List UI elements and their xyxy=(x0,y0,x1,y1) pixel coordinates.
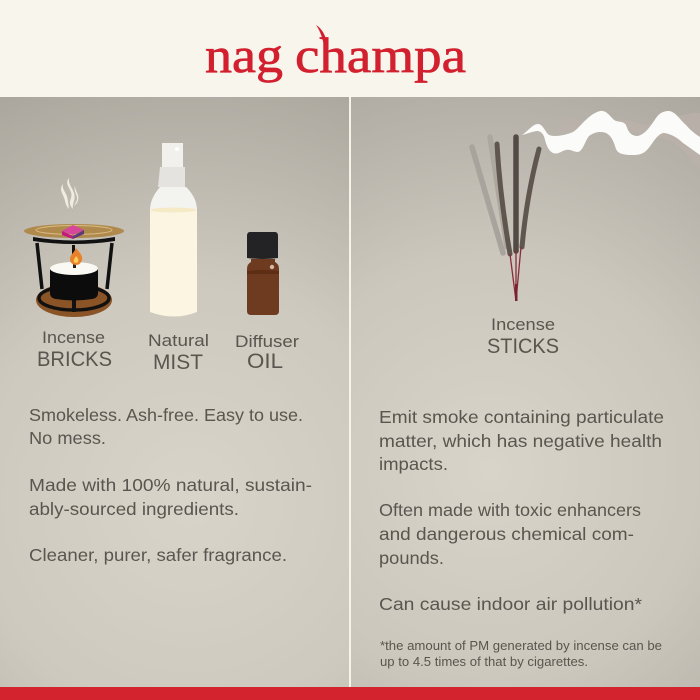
panel: left products xyxy=(0,97,349,687)
label: incense bricks: Incense xyxy=(42,329,105,347)
label: incense sticks: STICKS xyxy=(487,335,559,358)
label: natural mist: Natural xyxy=(148,332,209,350)
icon: diffuser oil bottle xyxy=(247,232,279,315)
icon: smoke xyxy=(522,111,700,169)
label: incense bricks xyxy=(37,329,112,371)
text block: harms: Emit smoke containing particulate xyxy=(379,407,664,427)
title: nag xyxy=(205,27,283,83)
text block: harms: matter, which has negative health xyxy=(379,431,662,451)
text block: harms xyxy=(379,407,664,614)
text block: benefits: ably-sourced ingredients. xyxy=(29,499,239,519)
label: incense sticks xyxy=(487,316,559,358)
label: natural mist xyxy=(148,332,209,374)
footnote xyxy=(380,639,662,669)
footnote: up to 4.5 times of that by cigarettes. xyxy=(380,655,588,669)
text block: benefits: Made with 100% natural, sustain- xyxy=(29,475,312,495)
icon: natural mist bottle xyxy=(150,143,197,316)
label: natural mist: MIST xyxy=(153,351,203,374)
text block: benefits xyxy=(29,405,312,565)
label: diffuser oil: Diffuser xyxy=(235,333,300,351)
panel: right sticks xyxy=(351,97,700,687)
footnote: *the amount of PM generated by incense can be xyxy=(380,639,662,653)
label: incense sticks: Incense xyxy=(491,316,555,334)
title xyxy=(205,25,466,83)
text block: benefits: Smokeless. Ash-free. Easy to use. xyxy=(29,405,303,425)
label: diffuser oil xyxy=(235,333,300,373)
icon: incense sticks xyxy=(472,137,539,301)
bottom red bar xyxy=(0,687,700,700)
label: diffuser oil: OIL xyxy=(247,350,283,373)
icon: incense brick burner xyxy=(24,178,124,317)
title: champa xyxy=(295,27,466,83)
text block: harms: impacts. xyxy=(379,454,448,474)
text block: benefits: No mess. xyxy=(29,428,106,448)
text block: harms: and dangerous chemical com- xyxy=(379,524,634,544)
text block: harms: Often made with toxic enhancers xyxy=(379,500,641,520)
text block: harms: pounds. xyxy=(379,548,444,568)
label: incense bricks: BRICKS xyxy=(37,348,112,371)
text block: benefits: Cleaner, purer, safer fragrance. xyxy=(29,545,287,565)
text block: harms: Can cause indoor air pollution* xyxy=(379,594,642,614)
header band xyxy=(0,0,700,97)
